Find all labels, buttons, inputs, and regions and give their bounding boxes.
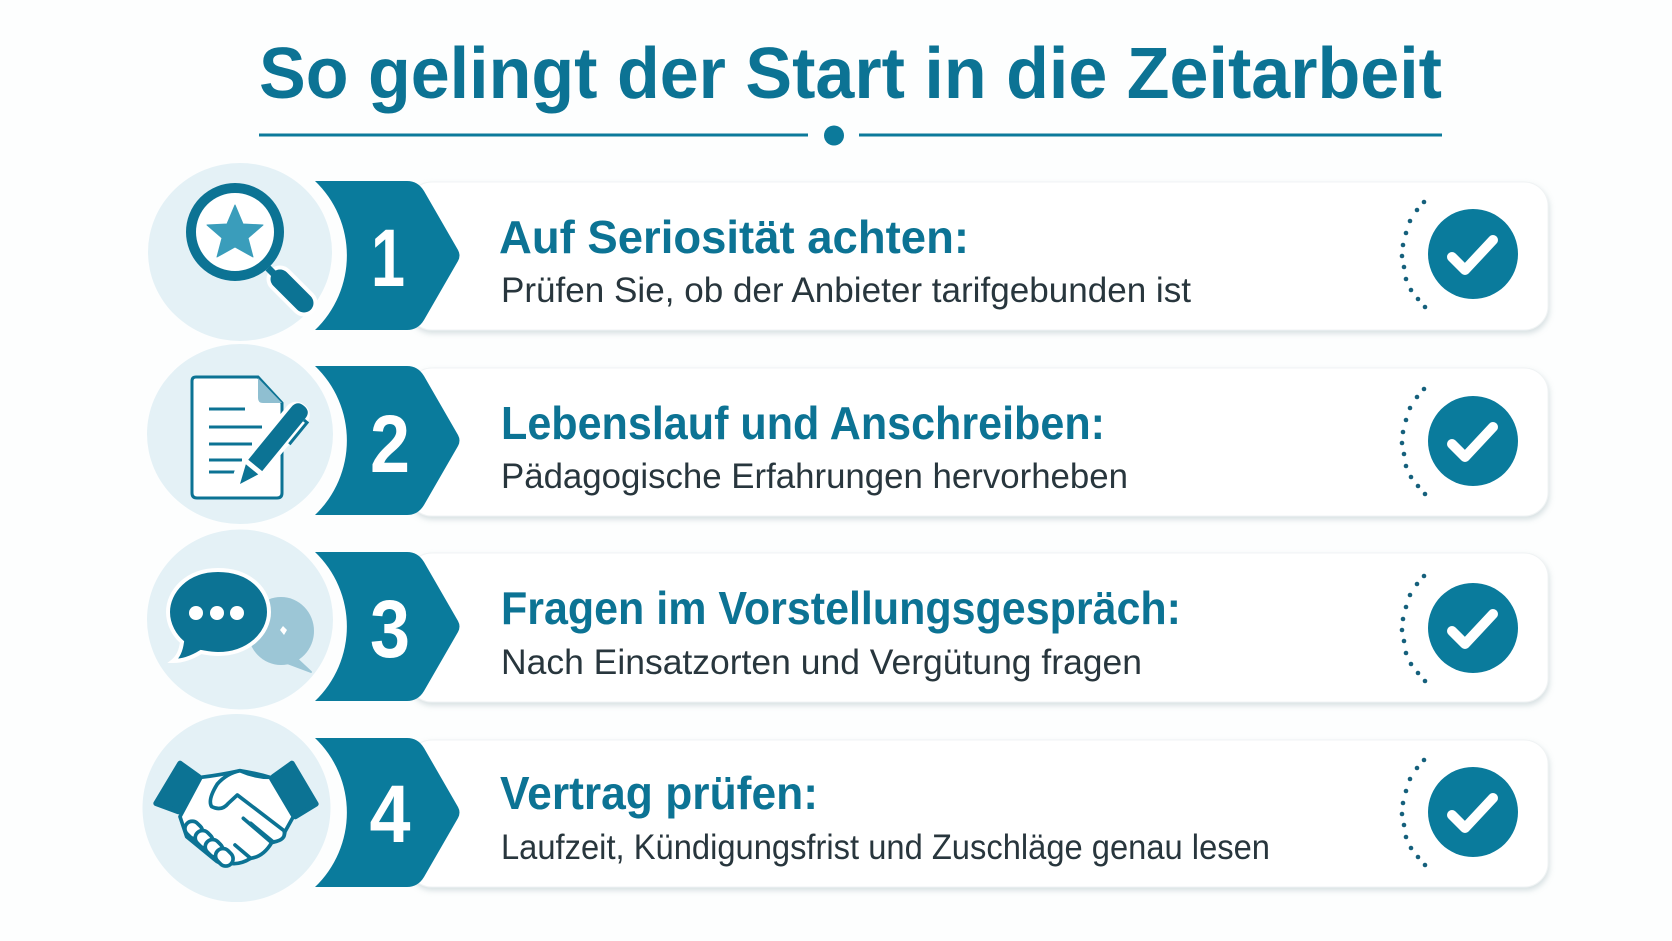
icon: magnifier with star xyxy=(191,188,304,303)
check badge 1 xyxy=(1400,200,1518,309)
title: So gelingt der Start in die Zeitarbeit xyxy=(259,34,1442,114)
panel: step 1 xyxy=(148,163,1548,341)
number 4: 4 xyxy=(370,769,411,860)
check badge 4 xyxy=(1400,758,1518,867)
chevron 2 xyxy=(315,366,460,515)
icon: speech bubbles xyxy=(168,570,314,672)
description 3: Nach Einsatzorten und Vergütung fragen xyxy=(501,643,1142,682)
check badge 3 xyxy=(1400,574,1518,683)
card 4 xyxy=(408,740,1548,887)
heading 4: Vertrag prüfen: xyxy=(500,767,818,819)
panel: step 2 xyxy=(147,344,1548,524)
heading 1: Auf Seriosität achten: xyxy=(499,211,969,263)
description 1: Prüfen Sie, ob der Anbieter tarifgebunden ist xyxy=(501,271,1191,310)
icon: handshake xyxy=(156,763,316,869)
chevron 1 xyxy=(315,181,460,330)
card 3 xyxy=(408,553,1548,702)
number 2: 2 xyxy=(370,399,410,490)
icon background 3 xyxy=(147,530,333,710)
icon: document and pen xyxy=(192,377,315,498)
number 3: 3 xyxy=(370,584,410,675)
check badge 2 xyxy=(1400,387,1518,496)
number 1: 1 xyxy=(371,213,405,304)
heading 2: Lebenslauf und Anschreiben: xyxy=(501,397,1105,449)
description 4: Laufzeit, Kündigungsfrist und Zuschläge genau lesen xyxy=(501,828,1270,867)
description 2: Pädagogische Erfahrungen hervorheben xyxy=(501,457,1128,496)
heading 3: Fragen im Vorstellungsgespräch: xyxy=(501,582,1181,634)
title divider xyxy=(259,126,1442,146)
icon background 4 xyxy=(142,714,330,902)
icon background 1 xyxy=(148,163,332,341)
card 1 xyxy=(408,182,1548,330)
panel: step 4 xyxy=(142,714,1548,902)
chevron 4 xyxy=(315,738,460,887)
panel: step 3 xyxy=(147,530,1548,710)
icon background 2 xyxy=(147,344,333,524)
card 2 xyxy=(408,368,1548,516)
chevron 3 xyxy=(315,552,460,701)
